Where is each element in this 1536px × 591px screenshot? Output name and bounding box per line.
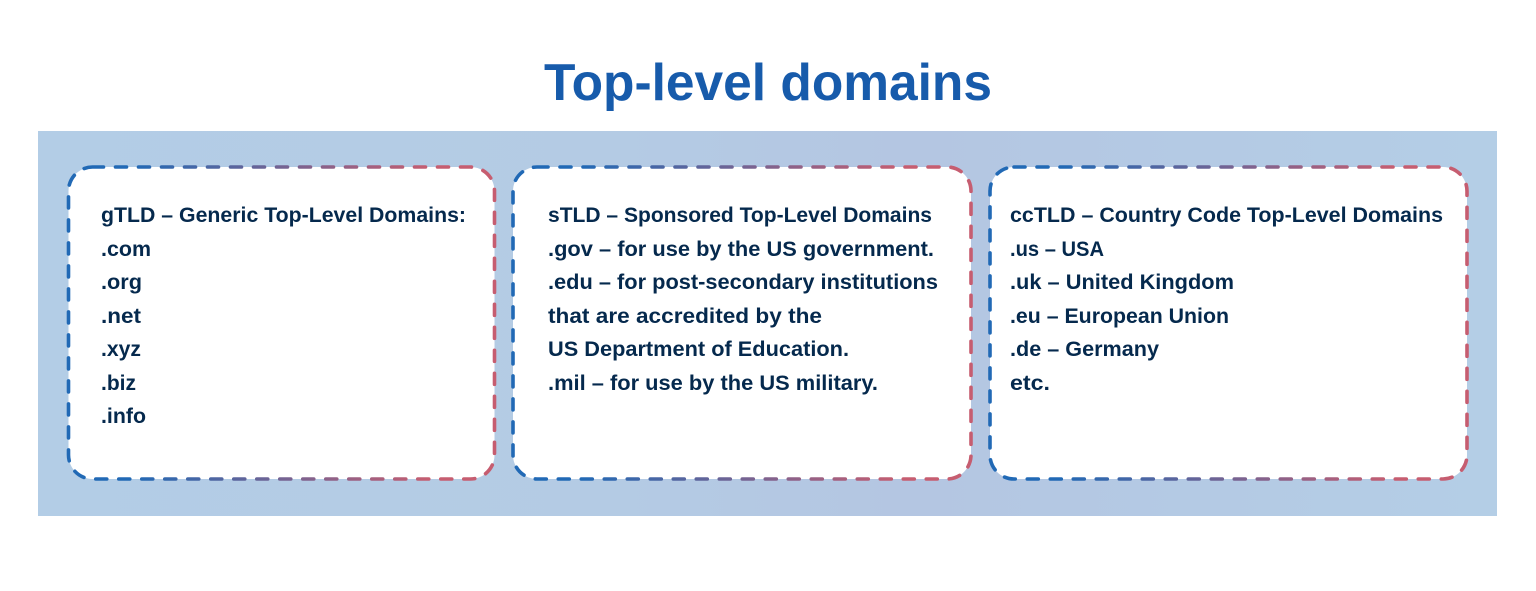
- text: gTLD list: .xyz: [101, 338, 141, 361]
- text: sTLD list: .edu – for post-secondary institutions: [548, 271, 938, 294]
- text: ccTLD list: .uk – United Kingdom: [1010, 271, 1234, 294]
- text: ccTLD list: ccTLD – Country Code Top-Level Domains: [1010, 204, 1443, 227]
- text: sTLD list: [548, 204, 938, 395]
- text: sTLD list: that are accredited by the: [548, 305, 822, 328]
- text: sTLD list: US Department of Education.: [548, 338, 849, 361]
- text: gTLD list: .info: [101, 405, 146, 428]
- text: gTLD list: .org: [101, 271, 142, 294]
- text: sTLD list: sTLD – Sponsored Top-Level Domains: [548, 204, 932, 227]
- text: sTLD list: .gov – for use by the US government.: [548, 238, 934, 261]
- text: gTLD list: .biz: [101, 372, 136, 395]
- text: ccTLD list: .us – USA: [1010, 238, 1104, 261]
- text: ccTLD list: etc.: [1010, 372, 1050, 395]
- text: gTLD list: [101, 204, 466, 428]
- panel: sTLD: [513, 167, 971, 479]
- title: Top-level domains: [544, 54, 992, 112]
- text: gTLD list: .net: [101, 305, 141, 328]
- text: ccTLD list: .eu – European Union: [1010, 305, 1229, 328]
- background panel: [38, 131, 1497, 516]
- text: ccTLD list: .de – Germany: [1010, 338, 1159, 361]
- text: gTLD list: .com: [101, 238, 151, 261]
- panel: ccTLD: [990, 167, 1467, 479]
- text: gTLD list: gTLD – Generic Top-Level Domains:: [101, 204, 466, 227]
- panel: gTLD: [68, 167, 494, 479]
- text: ccTLD list: [1010, 204, 1443, 395]
- text: sTLD list: .mil – for use by the US military.: [548, 372, 878, 395]
